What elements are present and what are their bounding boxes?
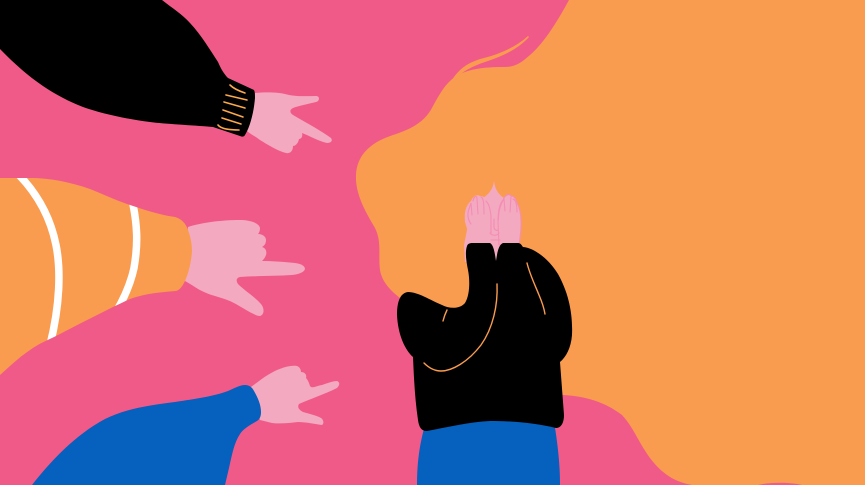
finger lines [468, 197, 517, 240]
pink gap along the bottom edge [758, 483, 802, 485]
hair strand [452, 36, 529, 80]
blue jeans [417, 415, 560, 485]
person: hands over face [397, 181, 572, 485]
left hand [465, 195, 491, 245]
bottom arm: blue sleeve pointing [32, 366, 339, 485]
long orange hair [356, 0, 865, 485]
right hand [498, 195, 521, 245]
hand [185, 220, 305, 316]
sweater seam lines [424, 263, 545, 371]
white stripes clipped to sleeve [14, 170, 137, 345]
sleeve [32, 385, 261, 485]
middle arm: orange striped sleeve pointing [0, 170, 305, 375]
black sweater [397, 243, 572, 431]
hand [247, 92, 332, 153]
sleeve [0, 178, 192, 375]
cuff ribbing [218, 85, 247, 130]
head [464, 181, 518, 264]
hand [251, 366, 339, 425]
sleeve [0, 0, 255, 137]
top arm: black sleeve pointing [0, 0, 332, 153]
